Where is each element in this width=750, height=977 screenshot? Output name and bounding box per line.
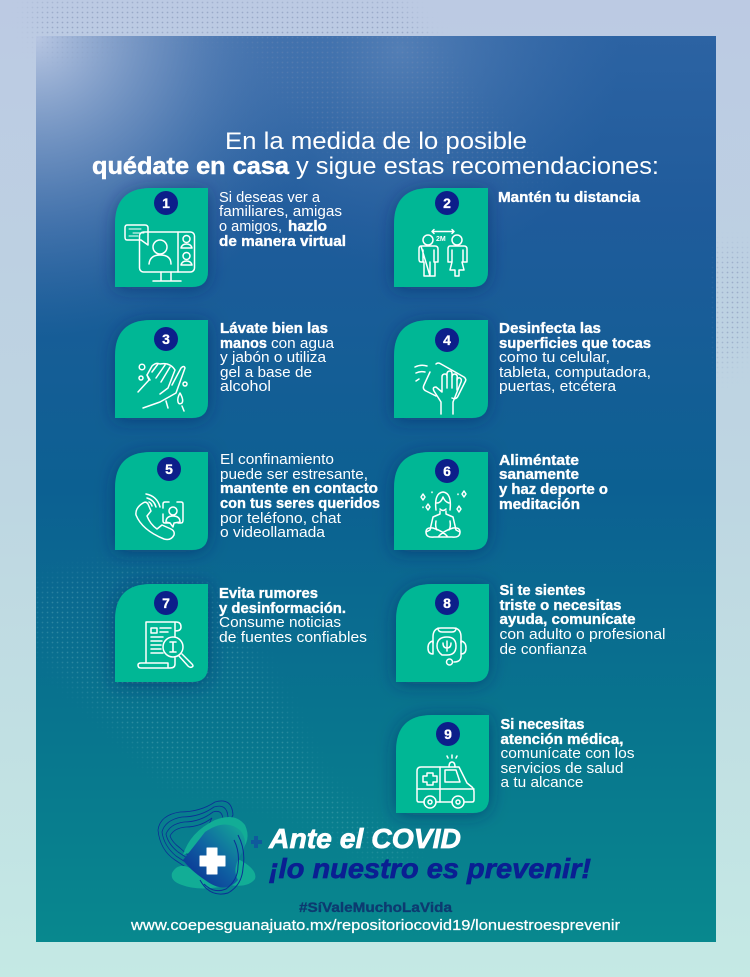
logo: small plus [251, 836, 262, 848]
icon: support headset [428, 628, 466, 665]
number 9: 9 [444, 726, 452, 742]
text 6: Aliméntate [499, 453, 579, 469]
text 3: con agua [271, 336, 335, 352]
logo: green upper blob [183, 817, 248, 855]
logo: contour lines [158, 801, 233, 870]
text 6: sanamente [499, 467, 579, 483]
title: En la medida de lo posible [225, 128, 527, 155]
number 3 [154, 327, 178, 351]
text 9 [500, 717, 634, 791]
icon: washing hands [138, 363, 187, 411]
number 6: 6 [443, 463, 451, 479]
text 3: manos [220, 336, 267, 352]
text 1 [219, 190, 346, 250]
text 6 [499, 453, 608, 513]
number 8 [435, 591, 459, 615]
text 1: o amigos, [219, 219, 282, 235]
text 3: Lávate bien las [220, 321, 328, 337]
dotted wave texture: top of page [27, 2, 748, 368]
text 9: servicios de salud [500, 761, 624, 777]
recommendation 8 [396, 583, 666, 682]
text 7: de fuentes confiables [219, 630, 367, 646]
text 8: triste o necesitas [500, 598, 622, 614]
number 2 [435, 191, 459, 215]
title: quédate en casa [92, 153, 290, 180]
text 1: familiares, amigas [219, 204, 342, 220]
text 1: hazlo [288, 219, 327, 235]
number 8: 8 [443, 595, 451, 611]
icon: disinfect surface [415, 363, 466, 414]
text 7: Evita rumores [219, 586, 318, 602]
text 5: por teléfono, chat [220, 511, 341, 527]
hashtag: #SíValeMuchoLaVida [299, 900, 453, 915]
website address: www.coepesguanajuato.mx/repositoriocovid19/lonuestroesprevenir [130, 917, 620, 934]
text 4 [499, 321, 651, 395]
card 6 [394, 452, 488, 550]
logo: white cross [200, 848, 225, 874]
text 4: tableta, computadora, [499, 365, 651, 381]
logo: green lower blob [172, 860, 255, 888]
recommendation 2 [394, 188, 641, 287]
card 8 [396, 584, 489, 682]
campaign headline [268, 823, 591, 884]
text 3: gel a base de [220, 365, 312, 381]
number 6 [435, 459, 459, 483]
number 7: 7 [162, 595, 170, 611]
text 7: Consume noticias [219, 615, 341, 631]
text 5 [220, 452, 380, 541]
number 7 [154, 591, 178, 615]
icon: two metre distance [419, 230, 467, 276]
text 1: Si deseas ver a [219, 190, 321, 206]
logo: lower contour lines [200, 835, 244, 894]
card 4 [394, 320, 488, 418]
recommendation 7 [115, 584, 367, 682]
text 8: Si te sientes [500, 583, 586, 599]
number 4: 4 [443, 332, 451, 348]
recommendation 3 [115, 320, 335, 418]
recommendation 6 [394, 452, 608, 550]
text 5: puede ser estresante, [220, 467, 368, 483]
recommendation 4 [394, 320, 651, 418]
text 8: ayuda, comunícate [500, 612, 636, 628]
card 7 [115, 584, 208, 682]
text 8: con adulto o profesional [500, 627, 666, 643]
text 4: como tu celular, [499, 350, 610, 366]
title [92, 128, 659, 180]
number 5: 5 [165, 461, 173, 477]
text 9: Si necesitas [500, 717, 584, 733]
text 6: y haz deporte o [499, 482, 608, 498]
number 1: 1 [162, 195, 170, 211]
recommendation 5 [115, 452, 380, 550]
text 9: a tu alcance [500, 775, 584, 791]
text 8: de confianza [500, 642, 587, 658]
card 1 [115, 188, 208, 287]
text 5: El confinamiento [220, 452, 334, 468]
text 1: de manera virtual [219, 234, 346, 250]
text 8 [500, 583, 666, 658]
recommendation 1 [115, 188, 346, 287]
text 2: Mantén tu distancia [498, 190, 641, 206]
number 2: 2 [443, 195, 451, 211]
number 5 [157, 457, 181, 481]
logo: blue blob [183, 824, 245, 888]
number 3: 3 [162, 331, 170, 347]
text 9: atención médica, [500, 732, 624, 748]
icon: phone and video call [136, 494, 183, 540]
number 9 [436, 722, 460, 746]
text 3: alcohol [220, 379, 271, 395]
number 1 [154, 191, 178, 215]
recommendation 9 [396, 715, 634, 813]
card 3 [115, 320, 208, 418]
label 2M: 2M [436, 236, 446, 243]
icon: ambulance [417, 755, 474, 808]
text 5: con tus seres queridos [220, 496, 380, 512]
number 4 [435, 328, 459, 352]
card 9 [396, 715, 489, 813]
campaign headline: Ante el COVID [268, 823, 461, 854]
card 5 [115, 452, 208, 550]
campaign headline: ¡lo nuestro es prevenir! [269, 853, 591, 884]
text 6: meditación [499, 497, 580, 513]
icon: video call [125, 225, 194, 281]
text 7: y desinformación. [219, 601, 346, 617]
text 3 [220, 321, 335, 395]
card 2 [394, 188, 488, 287]
text 5: o videollamada [220, 525, 326, 541]
title: y sigue estas recomendaciones: [296, 153, 659, 180]
campaign logo [158, 801, 262, 894]
text 3: y jabón o utiliza [220, 350, 327, 366]
text 4: superficies que tocas [499, 336, 651, 352]
icon: meditation [421, 491, 466, 537]
text 4: puertas, etcétera [499, 379, 617, 395]
text 5: mantente en contacto [220, 481, 378, 497]
text 7 [219, 586, 367, 646]
text 9: comunícate con los [500, 746, 634, 762]
text 4: Desinfecta las [499, 321, 601, 337]
icon: document with magnifier [138, 622, 193, 668]
